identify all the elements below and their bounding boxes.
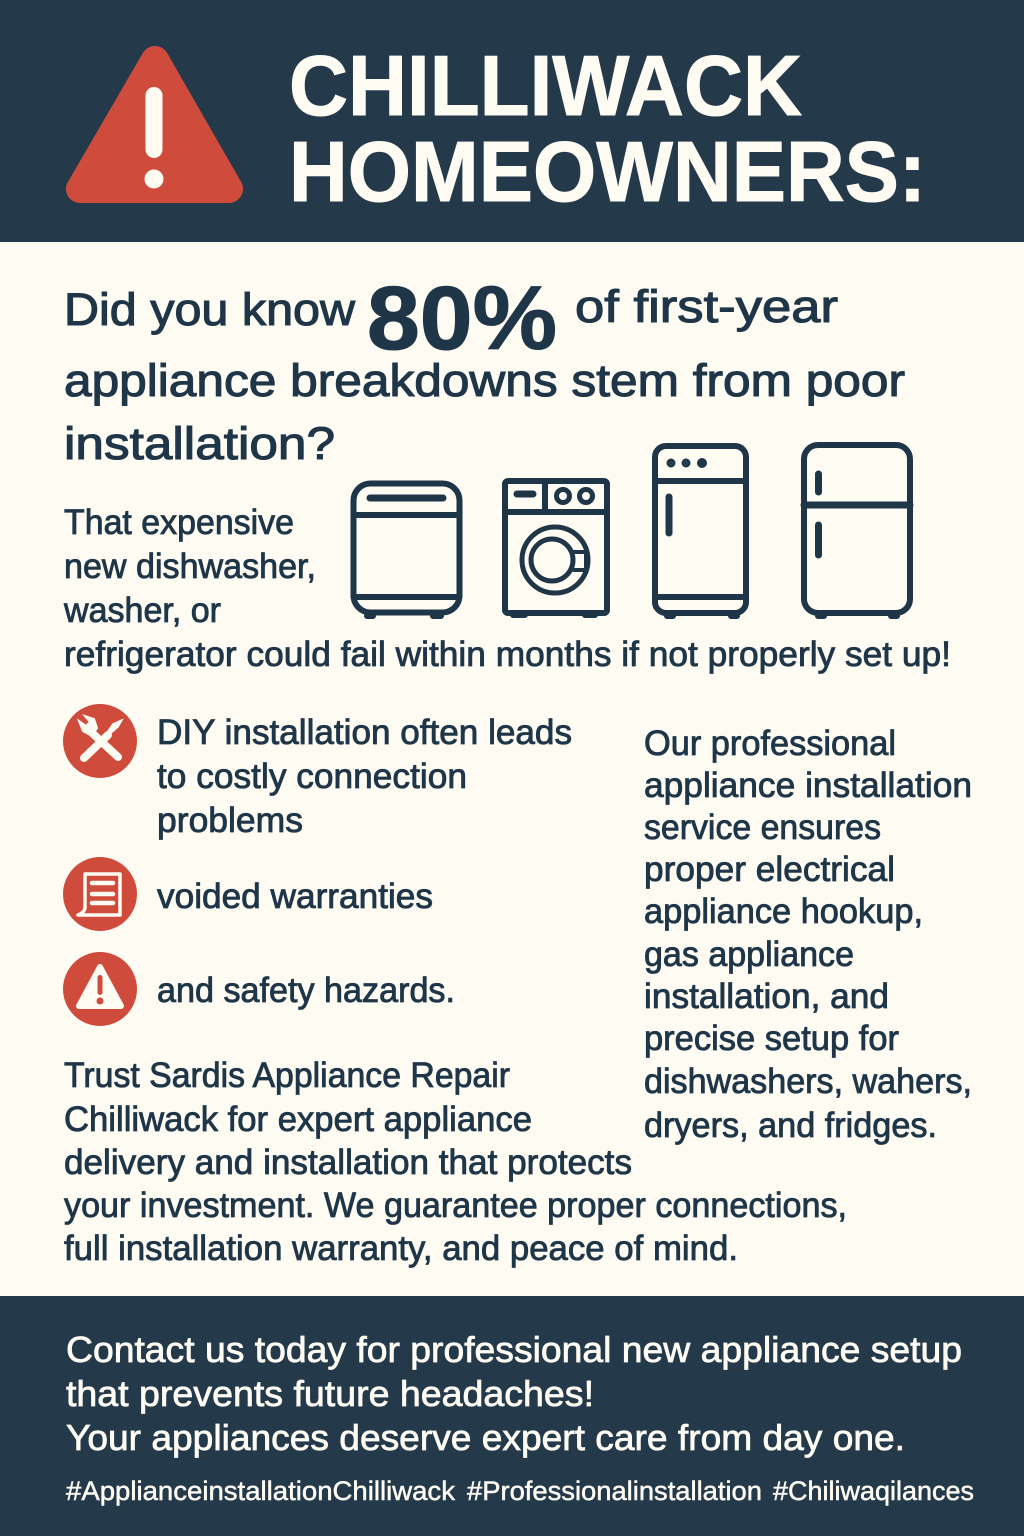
call to action: Contact us today for professional new appliance setup [66,1329,962,1370]
text: professional service: installation, and [644,977,889,1016]
hashtags: #ApplianceinstallationChilliwack [66,1476,455,1506]
call to action: that prevents future headaches! [66,1373,594,1414]
hashtags: #Chiliwaqilances [773,1476,974,1506]
text: professional service: Our professional [644,724,896,763]
text: professional service [644,724,972,1145]
text: voided warranties: voided warranties [157,877,433,916]
text: professional service: gas appliance [644,935,854,974]
headline statistic: installation? [64,418,335,469]
footer banner [0,1296,1024,1536]
hashtags [66,1476,974,1506]
text: trust paragraph: delivery and installation that protects [64,1143,632,1182]
text: trust paragraph: full installation warranty, and peace of mind. [64,1229,738,1268]
intro text [63,503,951,674]
text: trust paragraph [64,1056,847,1268]
icon: safety hazard [63,952,137,1026]
text: safety hazards: and safety hazards. [157,971,455,1010]
title [289,39,926,220]
problems list [63,704,572,1026]
title: HOMEOWNERS: [289,125,926,220]
headline statistic: appliance breakdowns stem from poor [64,355,905,406]
text: DIY problems: problems [157,801,303,840]
text: professional service: dishwashers, wahers, [644,1062,972,1101]
text: trust paragraph: Trust Sardis Appliance Repair [64,1056,510,1095]
text: professional service: appliance hookup, [644,892,923,931]
icon: tools [63,704,137,778]
icon: two-door refrigerator [804,445,910,616]
call to action [66,1329,962,1458]
headline statistic: 80% [367,269,557,369]
text: trust paragraph: Chilliwack for expert appliance [64,1100,532,1139]
intro text: new dishwasher, [64,547,316,586]
icon: warranty document [63,857,137,931]
text: trust paragraph: your investment. We guarantee proper connections, [64,1186,847,1225]
intro text: That expensive [64,503,294,542]
intro text: washer, or [63,591,221,630]
text: professional service: proper electrical [644,850,895,889]
icon: dishwasher [354,484,460,616]
text: DIY problems: DIY installation often leads [157,713,572,752]
header banner [0,0,1024,242]
call to action: Your appliances deserve expert care from day one. [66,1417,905,1458]
headline statistic: Did you know [64,284,356,335]
text: DIY problems [157,713,572,840]
text: DIY problems: to costly connection [157,757,467,796]
title: CHILLIWACK [289,39,802,134]
text: professional service: appliance installation [644,766,972,805]
text: professional service: dryers, and fridges. [644,1106,937,1145]
icon: washing machine [505,481,607,615]
headline statistic: of first-year [575,281,838,332]
icon: tall refrigerator with controls [655,446,746,616]
headline statistic [64,269,905,469]
hashtags: #Professionalinstallation [467,1476,762,1506]
icon: warning triangle [80,60,229,189]
text: professional service: precise setup for [644,1019,899,1058]
text: professional service: service ensures [644,808,881,847]
intro text: refrigerator could fail within months if not properly set up! [64,635,951,674]
